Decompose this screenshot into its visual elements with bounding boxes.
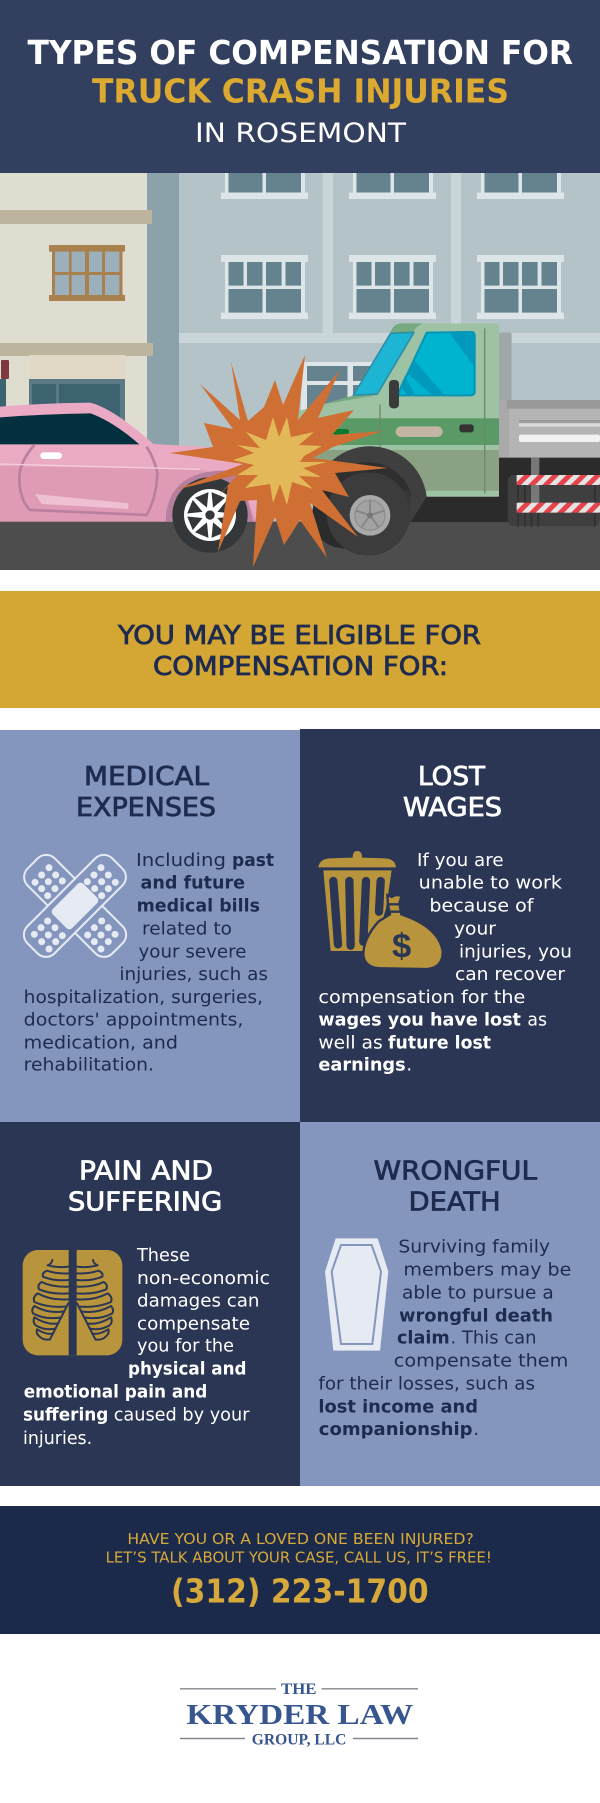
car window [0, 413, 139, 444]
pink car [0, 403, 257, 553]
car door [19, 445, 157, 515]
heading: medical expenses: MEDICAL [84, 762, 210, 792]
text: pain and suffering: damages can [137, 1290, 260, 1311]
text: medical expenses: your severe [138, 941, 246, 962]
heading: lost wages: WAGES [403, 793, 502, 823]
heading: medical expenses: EXPENSES [76, 793, 216, 823]
call to action text: LET’S TALK ABOUT YOUR CASE, CALL US, IT’S FREE! [106, 1548, 492, 1566]
text: medical expenses: injuries, such as [119, 964, 268, 985]
text: wrongful death: able to pursue a [402, 1283, 554, 1304]
call to action text [106, 1530, 492, 1566]
text: medical expenses: past [232, 850, 274, 871]
door handle [396, 426, 443, 437]
banner heading [117, 621, 481, 682]
upper windows [221, 173, 564, 199]
text: lost wages: future lost [388, 1032, 491, 1053]
header band [0, 0, 600, 173]
text: wrongful death: Surviving family [398, 1237, 550, 1258]
icon: coffin [325, 1238, 388, 1351]
text: lost wages: your [454, 918, 497, 939]
text: medical expenses: medication, and [24, 1032, 178, 1053]
icon: crossed bandages [19, 850, 131, 962]
text: wrongful death: companionship [319, 1419, 473, 1440]
text: lost wages: well as [318, 1032, 383, 1053]
icon: trash can and money bag [318, 851, 443, 969]
text: pain and suffering: caused by your [114, 1405, 250, 1426]
mirror [389, 380, 399, 408]
heading: lost wages [403, 762, 502, 823]
door window [397, 332, 475, 395]
middle windows [221, 255, 564, 319]
text: wrongful death: for their losses, such as [318, 1373, 535, 1394]
heading: pain and suffering: PAIN AND [79, 1157, 213, 1187]
text: medical expenses [24, 850, 274, 1075]
title: IN ROSEMONT [195, 118, 407, 149]
heading: medical expenses [76, 762, 216, 823]
text: medical expenses: doctors' appointments, [24, 1009, 243, 1030]
text: wrongful death: compensate them [394, 1351, 568, 1372]
text: lost wages: unable to work [419, 872, 563, 893]
hazard toolbox [508, 475, 600, 527]
text: wrongful death [318, 1237, 571, 1440]
door lines [380, 328, 485, 493]
logo: The Kryder Law Group: KRYDER LAW [186, 1699, 413, 1731]
truck bed [499, 332, 600, 508]
buildings [0, 173, 600, 523]
road [0, 522, 600, 570]
title [28, 34, 573, 149]
text: lost wages: wages you have lost [318, 1009, 521, 1030]
text: pain and suffering: compensate [137, 1313, 250, 1334]
text: pain and suffering: suffering [23, 1405, 108, 1426]
logo: The Kryder Law Group: GROUP, LLC [252, 1732, 346, 1749]
heading: wrongful death: DEATH [409, 1188, 501, 1218]
panel: lost wages [300, 729, 600, 1122]
text: lost wages: . [406, 1054, 412, 1075]
text: wrongful death: . [473, 1419, 479, 1440]
banner heading: COMPENSATION FOR: [153, 652, 448, 682]
explosion core [233, 417, 327, 505]
text: wrongful death: claim [397, 1328, 450, 1349]
text: pain and suffering: These [136, 1245, 190, 1266]
text: pain and suffering [23, 1245, 270, 1449]
explosion [170, 355, 388, 567]
text: lost wages: compensation for the [318, 987, 525, 1008]
heading: wrongful death [374, 1157, 538, 1218]
heading: wrongful death: WRONGFUL [374, 1157, 538, 1187]
phone number: (312) 223-1700 [171, 1572, 429, 1611]
logo: The Kryder Law Group [180, 1681, 418, 1749]
text: pain and suffering: injuries. [23, 1428, 92, 1449]
cab [290, 323, 499, 497]
heading: pain and suffering: SUFFERING [68, 1188, 222, 1218]
wheels [312, 446, 427, 556]
title: TYPES OF COMPENSATION FOR [28, 34, 573, 72]
text: medical expenses: rehabilitation. [24, 1054, 154, 1075]
text: wrongful death: . This can [450, 1328, 536, 1349]
text: lost wages: injuries, you [459, 941, 572, 962]
text: lost wages: earnings [318, 1054, 406, 1075]
title: TRUCK CRASH INJURIES [92, 72, 509, 110]
text: lost wages: If you are [417, 850, 504, 871]
text: wrongful death: members may be [403, 1260, 571, 1281]
dollar sign: $ [392, 927, 411, 965]
text: lost wages: can recover [455, 964, 566, 985]
chassis [400, 496, 508, 522]
icon: rib cage [23, 1250, 122, 1355]
text: pain and suffering: physical and [128, 1358, 246, 1379]
lower window behind truck [301, 362, 375, 424]
text: pain and suffering: non-economic [137, 1268, 270, 1289]
heading: lost wages: LOST [418, 762, 485, 792]
call to action text: HAVE YOU OR A LOVED ONE BEEN INJURED? [127, 1530, 474, 1548]
banner heading: YOU MAY BE ELIGIBLE FOR [117, 621, 481, 651]
text: pain and suffering: emotional pain and [24, 1381, 207, 1402]
text: wrongful death: wrongful death [399, 1305, 553, 1326]
illustration: truck crash street scene [0, 173, 600, 570]
text: medical expenses: and future [140, 872, 245, 893]
text: medical expenses: hospitalization, surgeries, [24, 987, 263, 1008]
car wheel [166, 471, 253, 553]
panel: wrongful death [300, 1122, 600, 1486]
banner: eligibility [0, 591, 600, 708]
text: medical expenses: medical bills [137, 895, 260, 916]
text: wrongful death: lost income and [318, 1396, 478, 1417]
heading: pain and suffering [68, 1157, 222, 1218]
storefront [0, 355, 125, 429]
text: medical expenses: related to [142, 918, 232, 939]
call to action band [0, 1506, 600, 1634]
text: medical expenses: Including [136, 850, 226, 871]
text: pain and suffering: you for the [137, 1335, 234, 1356]
logo: The Kryder Law Group: THE [281, 1681, 316, 1698]
panel: pain and suffering [0, 1122, 300, 1486]
text: lost wages [318, 850, 572, 1075]
text: lost wages: because of [429, 895, 534, 916]
truck [290, 323, 600, 556]
text: lost wages: as [527, 1009, 547, 1030]
windshield [353, 332, 414, 395]
left building window [49, 245, 125, 301]
panel: medical expenses [0, 730, 300, 1122]
